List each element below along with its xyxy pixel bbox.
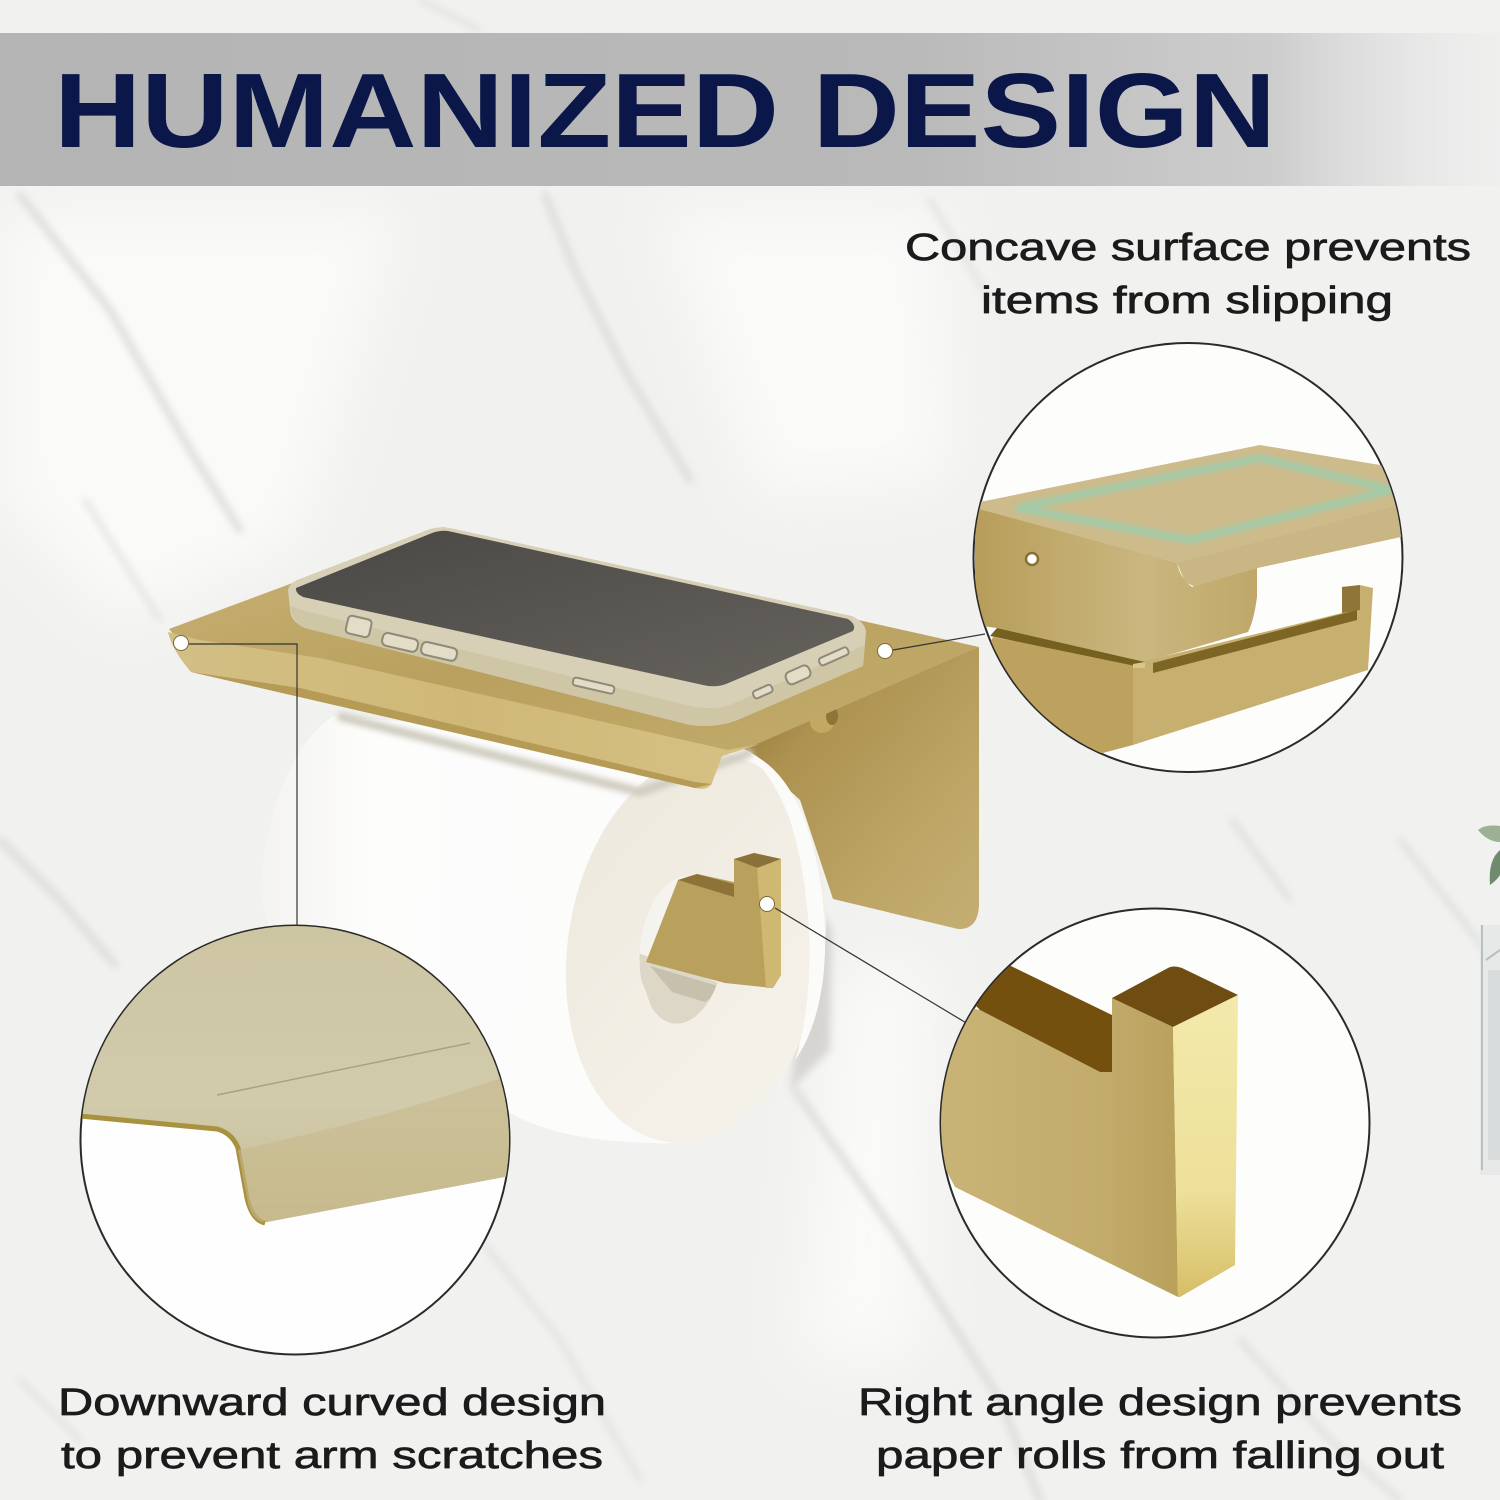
wall plate — [740, 647, 979, 929]
detail circle: concave surface — [960, 343, 1410, 780]
roll shadow on wall — [790, 900, 832, 1090]
screw — [810, 707, 838, 733]
caption: concave surface — [905, 227, 1471, 322]
detail circle: right angle hook — [930, 908, 1370, 1338]
roll end face — [539, 734, 853, 1162]
shelf — [168, 527, 979, 789]
shelf surface — [975, 445, 1410, 587]
roll outer sheet — [746, 752, 825, 1060]
title band — [0, 33, 1500, 186]
plate face — [975, 508, 1257, 662]
caption: right angle design: paper rolls from falling out — [876, 1435, 1445, 1477]
caption: downward curved design — [58, 1382, 606, 1477]
arm — [991, 637, 1133, 754]
phone — [288, 527, 866, 726]
mounting hole — [1026, 553, 1038, 565]
bracket arm — [646, 853, 781, 988]
caption: concave surface: items from slipping — [981, 280, 1393, 322]
caption: downward curved design: to prevent arm scratches — [61, 1435, 603, 1477]
shelf top surface — [169, 527, 979, 756]
teal highlight — [1017, 458, 1392, 540]
leader lines — [189, 634, 985, 1024]
caption: downward curved design: Downward curved design — [58, 1382, 606, 1424]
title: HUMANIZED DESIGN — [54, 52, 1276, 170]
callout dots — [174, 636, 892, 912]
caption: concave surface: Concave surface prevents — [905, 227, 1471, 269]
caption: right angle design: Right angle design prevents — [858, 1382, 1462, 1424]
roll hole — [640, 876, 718, 1024]
caption: right angle design — [858, 1382, 1462, 1477]
detail circle: downward curved edge — [75, 925, 515, 1354]
product: toilet paper holder with phone — [168, 527, 979, 1162]
paper roll body — [260, 716, 825, 1143]
shelf shadow on roll — [338, 716, 752, 792]
plant and bottle at right edge — [1478, 826, 1500, 1175]
shelf front lip — [168, 632, 760, 789]
